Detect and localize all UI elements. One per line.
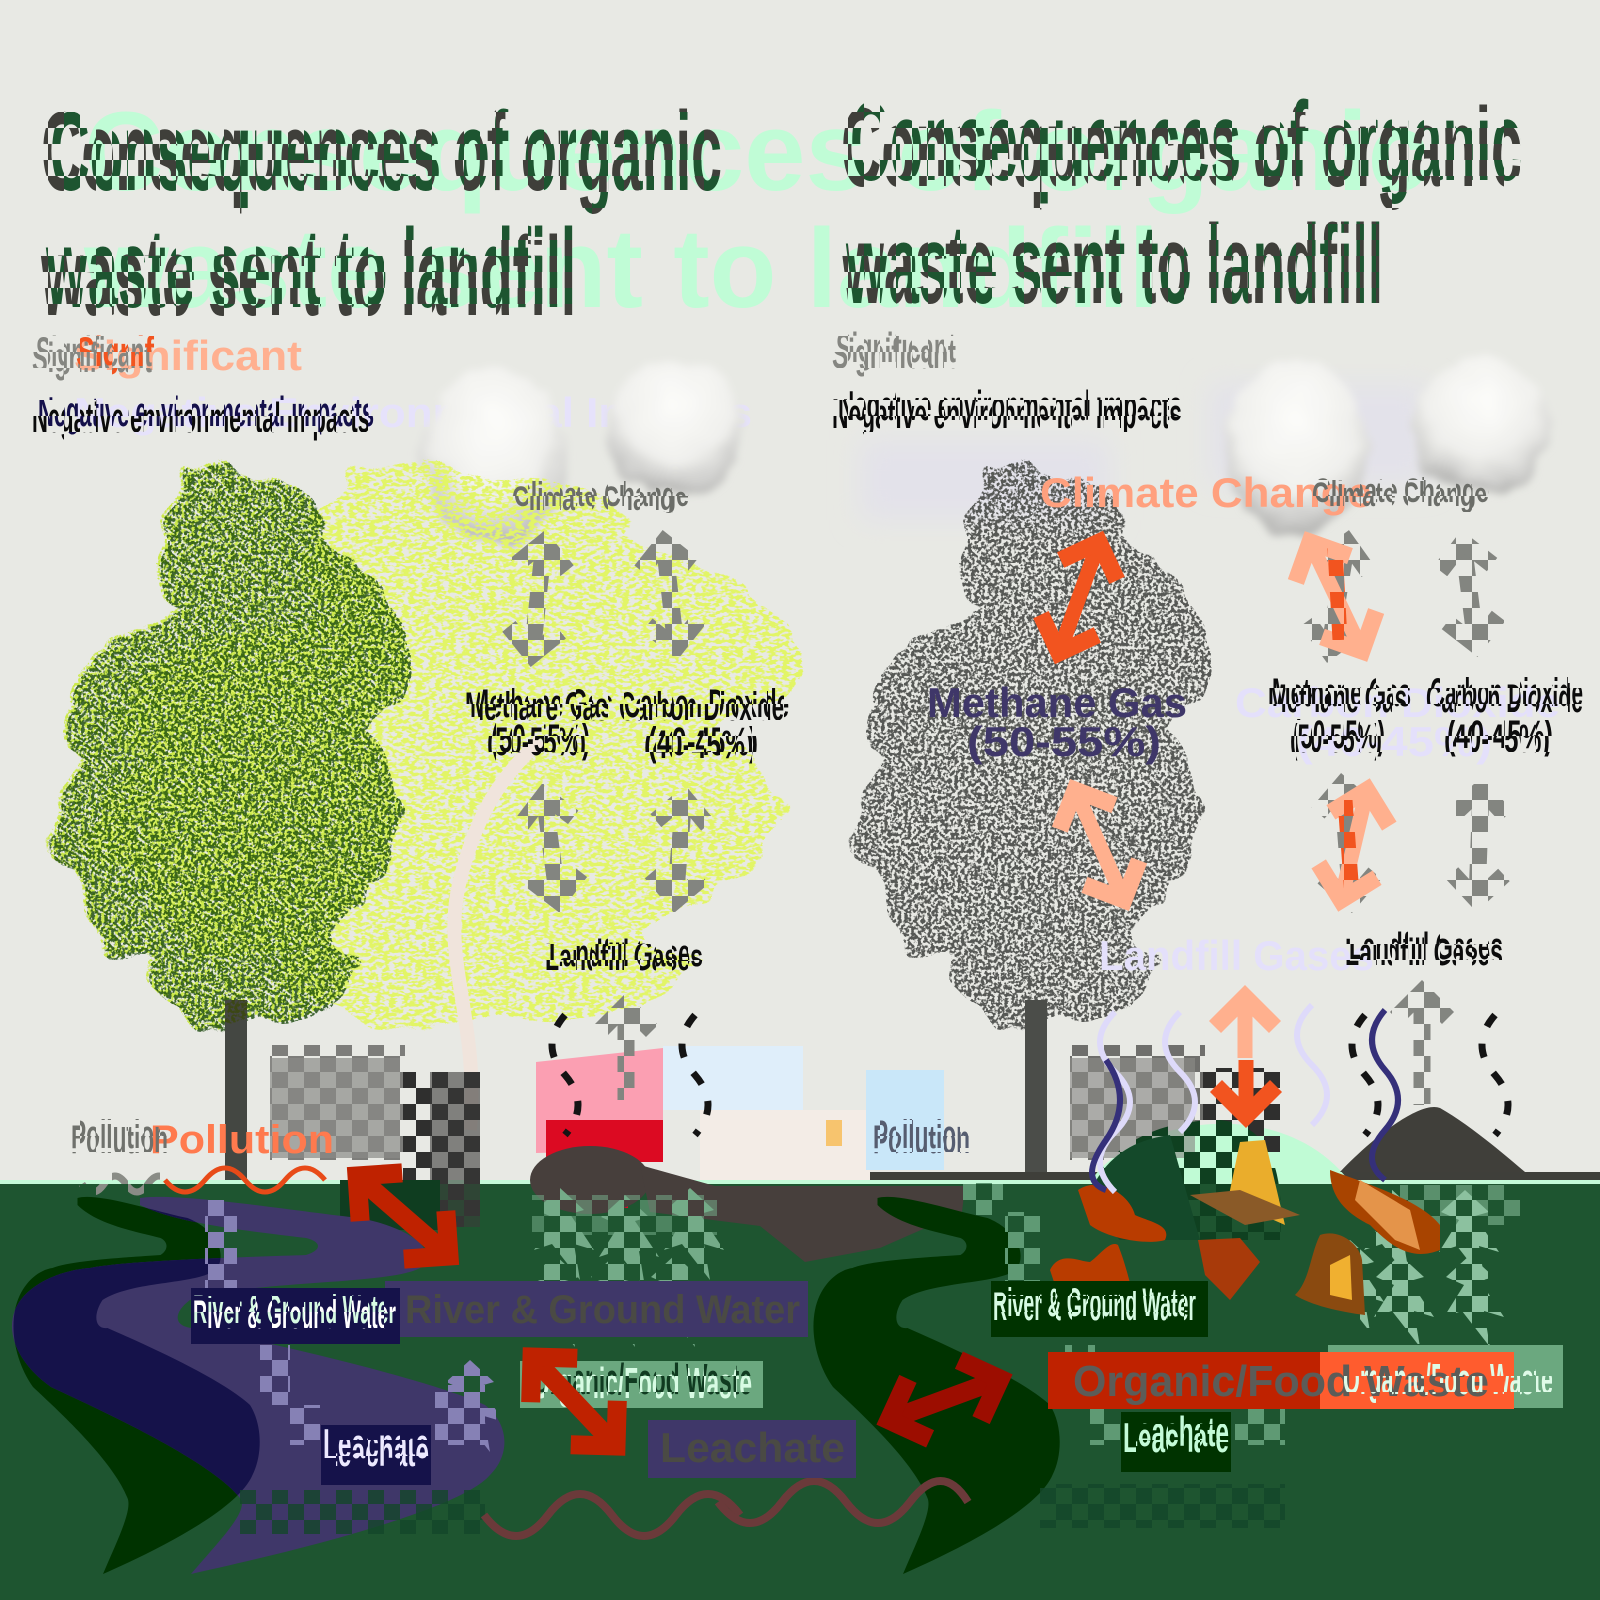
small wave: grey under pollution [82, 1176, 170, 1192]
subheading: right condensed: Negative environmental impacts [838, 382, 1182, 429]
label: leachate right: Leachate [1123, 1414, 1229, 1461]
label: methane and carbon dioxide narrow left: Methane Gas [465, 685, 608, 729]
subheading: left condensed: Significant [32, 334, 152, 381]
title: large mint ghost [83, 89, 1429, 331]
label: methane and carbon dioxide narrow left: (50-55%) [491, 717, 590, 761]
label: methane and carbon dioxide narrow right: Methane Gas [1268, 677, 1407, 721]
label: pollution narrow left: Pollution [71, 1118, 168, 1162]
wave: maroon bottom right [718, 1481, 968, 1523]
label: river and ground water right: River & Ground Water [993, 1281, 1196, 1325]
subheading: left condensed: Signif [76, 328, 155, 375]
truck: right grey [1070, 1045, 1280, 1168]
waste leaves: along the right bank [963, 1183, 1285, 1445]
label: leachate right: Leachate [1123, 1408, 1229, 1455]
river: purple wide [12, 1197, 504, 1574]
heading: significant negative environmental impacts ghost: Significant [74, 332, 302, 379]
food scraps [1050, 1140, 1440, 1323]
arrows: grey left column [532, 542, 684, 1100]
subheading: right condensed [832, 324, 1182, 437]
tree: right grey canopy [855, 465, 1205, 1185]
title: left condensed, grey phase: waste sent to landfill [41, 214, 576, 339]
label: leachate right [1121, 1408, 1231, 1472]
label: carbon dioxide wide [1235, 679, 1560, 765]
title: large mint ghost: waste sent to landfill [83, 206, 1159, 331]
label: climate change narrow left: Climate Change [514, 476, 689, 514]
label: organic food waste narrow right [1328, 1345, 1563, 1408]
label: climate change narrow left: Climate Change [512, 480, 687, 518]
landfill mound: right dark [1340, 1107, 1525, 1172]
label: methane and carbon dioxide narrow left [465, 682, 789, 767]
heading: significant negative environmental impacts ghost [74, 332, 752, 436]
wavy gas lines: lavender right [1100, 1005, 1327, 1192]
label: river and ground water right [991, 1281, 1208, 1337]
waste leaves: along the river [205, 1200, 504, 1452]
lavender haze behind right side [860, 385, 1430, 520]
label: pollution narrow right [873, 1113, 970, 1162]
title: left condensed, green phase [46, 89, 722, 331]
label: climate change wide: Climate Change [1040, 469, 1372, 516]
label: organic food waste narrow left: Organic/Food Waste [532, 1359, 752, 1408]
arrow: organic waste to leachate [532, 1357, 616, 1446]
label: pollution narrow left: Pollution [71, 1113, 168, 1157]
label: climate change narrow right: Climate Change [1314, 472, 1489, 510]
label: landfill gases narrow right [1345, 926, 1503, 974]
heading: significant negative environmental impacts ghost: Negative Environmental Impacts [74, 389, 752, 436]
label: methane and carbon dioxide narrow left: Carbon Dioxide [619, 685, 784, 729]
label: landfill gases narrow left: Landfill Gases [549, 933, 703, 975]
waste leaves: right cluster [1350, 1185, 1520, 1345]
label: climate change narrow right [1312, 472, 1489, 514]
label: methane and carbon dioxide narrow left: Methane Gas [470, 682, 613, 726]
text: Consequences of organic [50, 89, 722, 214]
truck: left grey detail [270, 1058, 480, 1230]
faint leaf shadows: bottom [240, 1484, 1285, 1534]
truck wheels and shadow [530, 1146, 965, 1262]
label: leachate navy: Leachate [323, 1428, 429, 1475]
subheading: left condensed: Significant [36, 328, 152, 375]
title: right condensed, green phase [846, 79, 1522, 327]
truck: light blue wide copy [663, 1046, 944, 1180]
label: carbon dioxide wide: (40-45%) [1297, 718, 1492, 765]
clouds [423, 357, 1550, 543]
label: pollution narrow right: Pollution [873, 1118, 970, 1162]
subheading: right condensed: Negative environmental impacts [832, 390, 1182, 437]
title: left condensed, green phase: waste sent to landfill [46, 206, 576, 331]
label: landfill gases narrow left: Landfill Gases [545, 937, 703, 979]
label: organic food waste wide: Organic/Food Waste [1073, 1357, 1489, 1406]
dark trash pile on right mound [1085, 1120, 1281, 1240]
waste leaves: left cluster [529, 1188, 724, 1347]
label: pollution wide: Pollution [150, 1118, 334, 1162]
label: methane and carbon dioxide narrow right: (50-55%) [1290, 717, 1382, 761]
label: climate change narrow right: Climate Change [1312, 476, 1487, 514]
label: methane and carbon dioxide narrow right [1268, 671, 1583, 761]
arrow: leachate to organic waste right [889, 1379, 1000, 1420]
label: methane and carbon dioxide narrow right: (50-55%) [1293, 713, 1385, 757]
label: river and ground water right: River & Ground Water [993, 1285, 1196, 1329]
label: methane and carbon dioxide narrow left: (40-45%) [644, 723, 754, 767]
label: methane gas wide: (50-55%) [967, 718, 1161, 765]
label: methane and carbon dioxide narrow right: Methane Gas [1272, 671, 1411, 715]
label: leachate navy [321, 1420, 431, 1485]
ground [0, 1172, 1600, 1600]
label: pollution narrow left [71, 1113, 168, 1162]
label: river and ground water wide: River & Ground Water [405, 1288, 800, 1332]
wave: orange under pollution [165, 1168, 325, 1192]
river: dark narrow copy on right [813, 1197, 1060, 1574]
text: River & Ground Water [193, 1288, 396, 1332]
wave: maroon bottom left [484, 1494, 740, 1536]
label: organic food waste narrow left [520, 1355, 763, 1408]
wavy gas lines: navy right [1092, 1010, 1398, 1190]
label: landfill gases narrow right: Landfill Gases [1345, 932, 1503, 974]
label: leachate navy: Leachate [323, 1420, 429, 1467]
label: organic food waste narrow left: Organic/Food Waste [532, 1355, 752, 1404]
title: right condensed, grey phase [841, 85, 1522, 327]
wavy gas lines: black dashed right [1352, 1015, 1508, 1135]
tree: lime wide canopy [52, 465, 790, 1130]
label: methane and carbon dioxide narrow left: (40-45%) [648, 720, 758, 764]
label: methane gas wide: Methane Gas [927, 679, 1187, 726]
river: dark narrow copy on left [13, 1197, 260, 1574]
truck: left grey [270, 1045, 480, 1227]
subheading: right condensed: Significant [832, 330, 956, 377]
arrows: orange inner phase on peach [1335, 548, 1352, 895]
label: methane gas wide [927, 679, 1187, 765]
text: Consequences of organic [41, 89, 722, 214]
title: large mint ghost: Consequences of organic [84, 89, 1429, 214]
trash pile second phase [1085, 1135, 1200, 1240]
arrow: red double, truck to river [357, 1176, 449, 1256]
text: River & Ground Water [193, 1293, 396, 1337]
arrows: orange and peach climate flows [1059, 542, 1367, 1116]
label: methane and carbon dioxide narrow left: Carbon Dioxide [624, 682, 789, 726]
subheading: right condensed: Significant [836, 324, 956, 371]
label: methane and carbon dioxide narrow left: (50-55%) [487, 720, 586, 764]
label: carbon dioxide wide: Carbon Dioxide [1235, 679, 1560, 726]
subheading: left condensed [32, 328, 374, 441]
truck: red wide copy [536, 1048, 663, 1208]
wavy gas lines: black dashed left [552, 1015, 708, 1135]
label: pollution narrow right: Pollution [873, 1113, 970, 1157]
label: landfill gases wide: Landfill Gases [1099, 932, 1374, 979]
label: leachate wide: Leachate [660, 1424, 845, 1471]
subheading: left condensed: Negative environmental impacts [38, 388, 374, 435]
title: left condensed, grey phase [41, 89, 722, 339]
landfill mound: right mint [1090, 1124, 1350, 1182]
tree: dark left canopy [55, 467, 405, 1185]
label: landfill gases narrow left [545, 933, 703, 979]
subheading: left condensed: Negative environmental impacts [32, 394, 370, 441]
river: navy overlap [14, 1208, 260, 1495]
truck: right grey detail [1070, 1058, 1195, 1158]
label: river and ground water navy [191, 1288, 400, 1344]
arrows: grey right column [1329, 542, 1481, 1105]
label: climate change narrow left [512, 476, 689, 518]
